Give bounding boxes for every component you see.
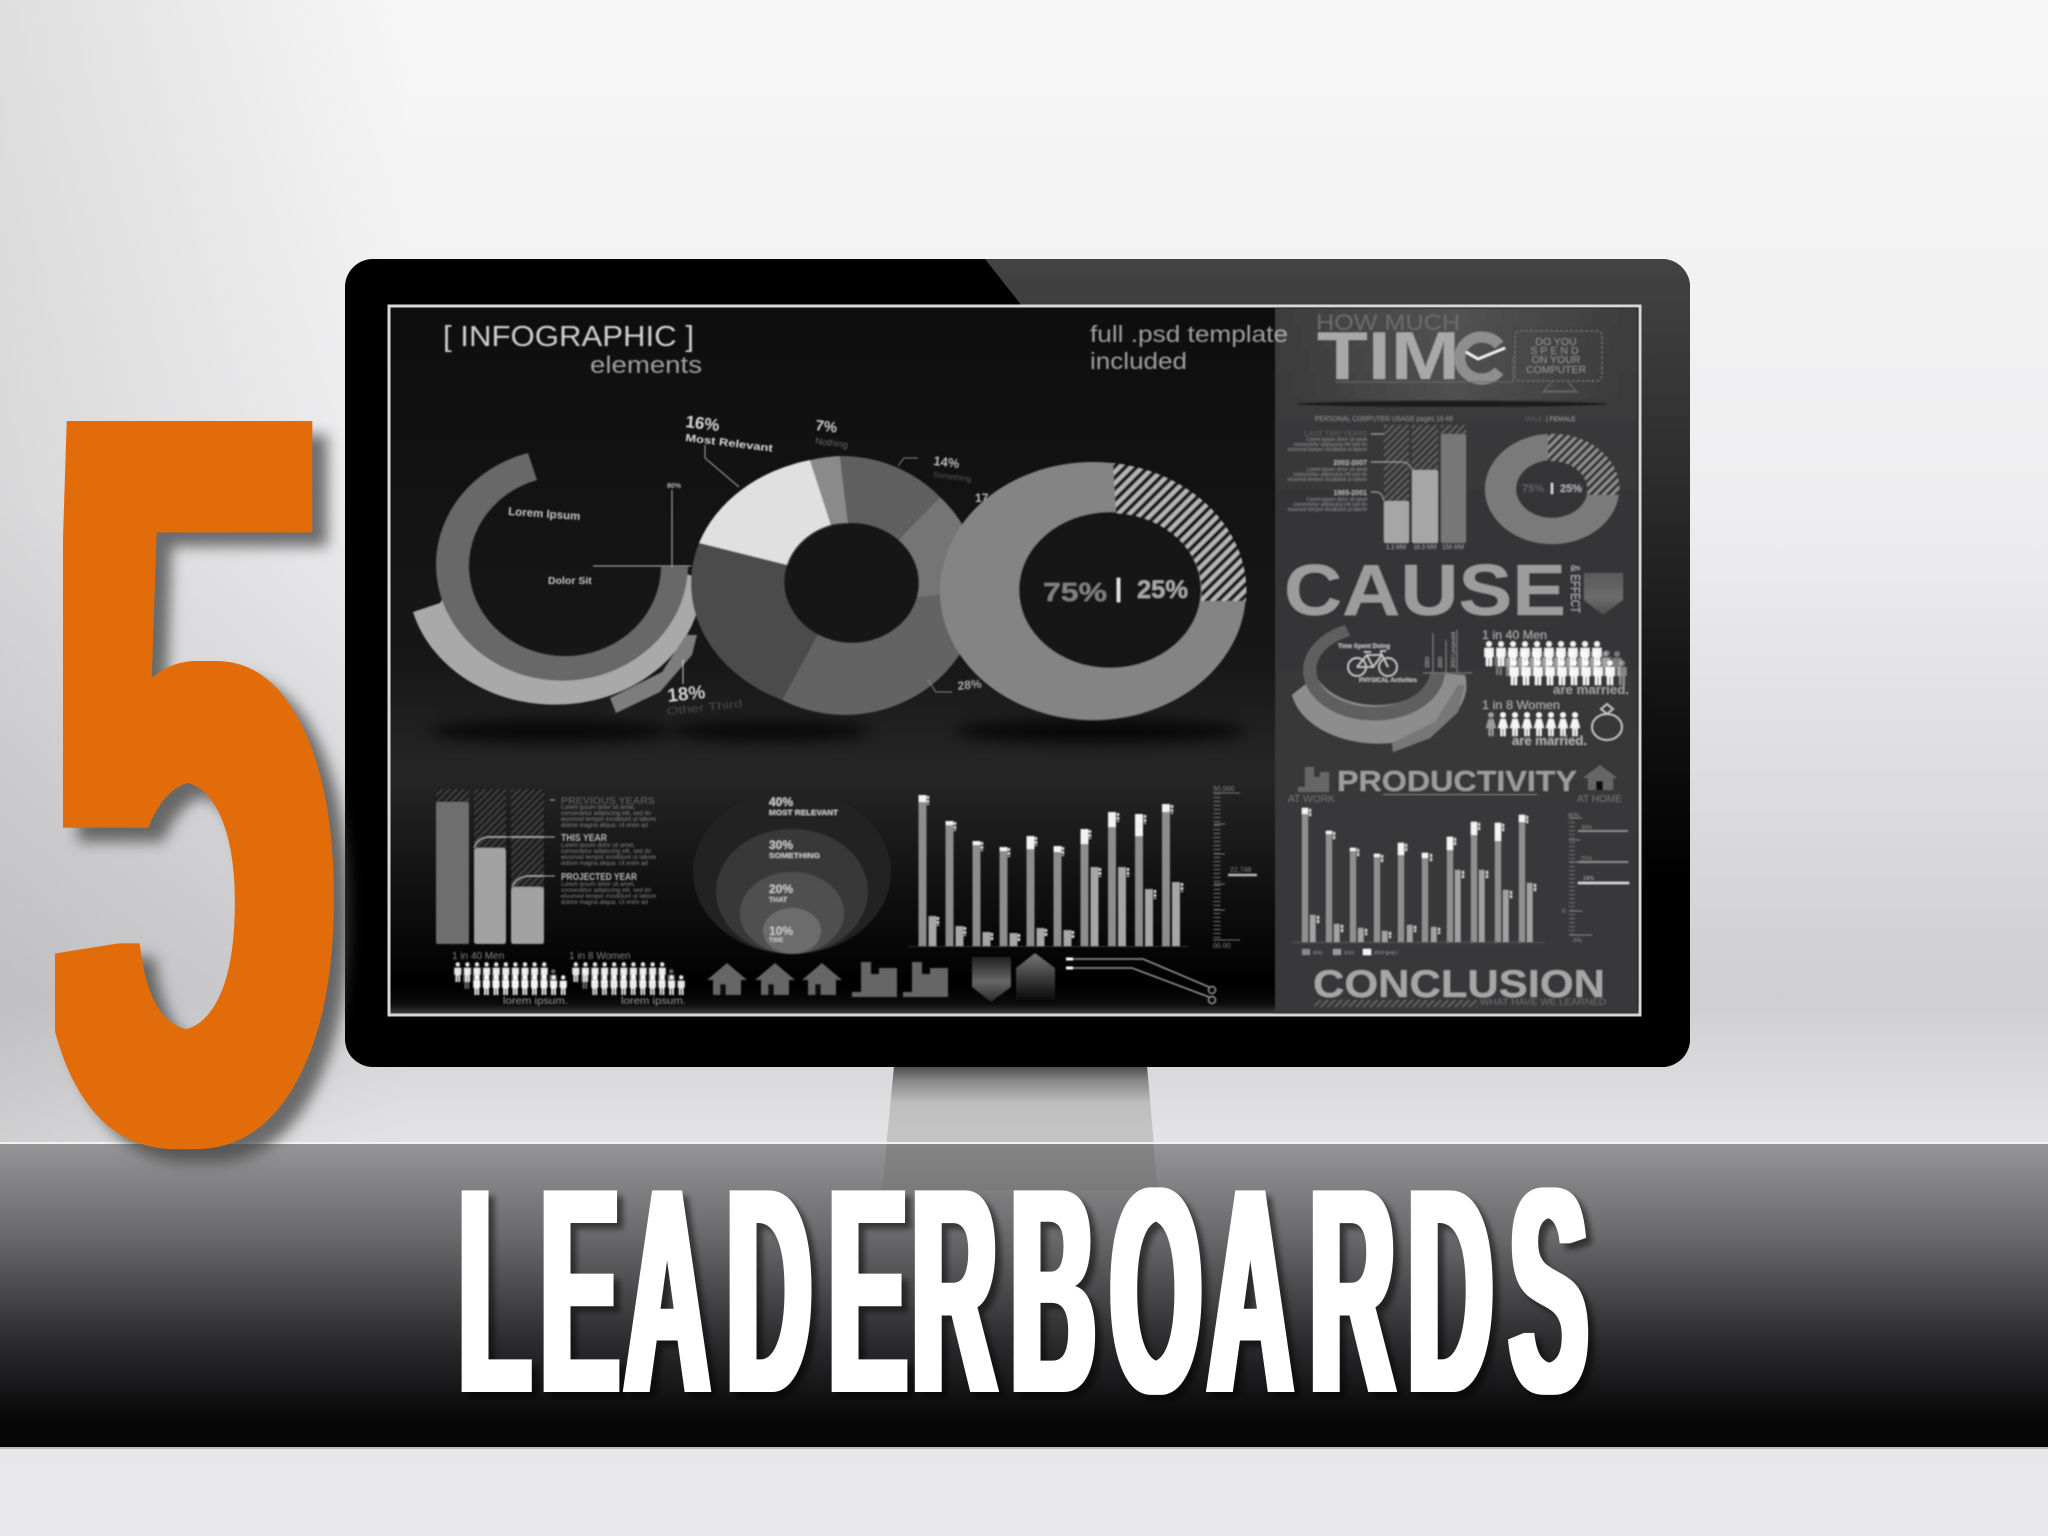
heading: infographic elements: [ INFOGRAPHIC ] <box>443 321 694 353</box>
label: 14% something: 14% <box>933 453 961 471</box>
chart: vertical scale <box>1213 786 1257 950</box>
heading: productivity: AT WORK <box>1288 794 1335 805</box>
heading: how much time: HOW MUCH <box>1316 310 1460 335</box>
usage period text: 2002-2007 <box>1334 460 1367 467</box>
chart: productivity bars <box>1292 808 1545 955</box>
icon: house <box>1583 765 1617 790</box>
chart: nested ovals <box>693 790 891 954</box>
chart heading: computer usage: PERSONAL COMPUTER USAGE pages 16-68 <box>1315 416 1453 423</box>
note: template included: full .psd template <box>1090 321 1288 347</box>
bar captions: 156 MM <box>1442 545 1464 551</box>
bar captions: 1.1 MM <box>1386 545 1406 551</box>
pictogram: 1 in 40 men are married: 1 in 40 Men <box>1482 628 1547 642</box>
bezel glare <box>985 259 1690 1067</box>
activity axis: 2000 <box>1438 657 1444 668</box>
bar legend text: consectetur adipiscing elit, sed do <box>561 811 652 817</box>
label: 16% most relevant: Most Relevant <box>685 432 774 455</box>
chart heading: computer usage: | FEMALE <box>1546 416 1576 423</box>
monitor stand <box>882 1066 1158 1190</box>
heading: conclusion: CONCLUSION <box>1313 963 1605 1006</box>
chart heading: computer usage: MALE <box>1525 416 1543 423</box>
bar legend text: eiusmod tempor incididunt ut labore <box>561 894 657 900</box>
heading: how much time: TIM <box>1317 318 1460 394</box>
label: 16% most relevant <box>685 412 774 455</box>
oval labels: MOST RELEVANT <box>769 810 839 817</box>
bar captions <box>1386 545 1464 551</box>
label: 14% something <box>898 453 972 484</box>
activity labels: PHYSICAL Activities <box>1359 678 1418 684</box>
chart: vertical scale: 50,000 <box>1213 786 1235 793</box>
bar legend text: eiusmod tempor incididunt ut labore <box>561 817 657 823</box>
chart legend <box>1302 949 1398 955</box>
chart: paired bar chart <box>908 795 1189 946</box>
chart: central segmented pie <box>666 412 989 718</box>
bottom title band <box>0 1142 2048 1449</box>
bar legend text: consectetur adipiscing elit, sed do <box>561 888 652 894</box>
activity labels <box>1338 644 1418 684</box>
heading: conclusion: WHAT HAVE WE LEARNED <box>1480 997 1607 1007</box>
icons: buildings <box>852 962 948 997</box>
usage period text <box>1288 431 1368 513</box>
activity axis: 1960 <box>1425 657 1431 668</box>
heading: productivity: PRODUCTIVITY <box>1337 766 1577 798</box>
icon: bicycle <box>1348 651 1397 676</box>
icon: clock <box>1460 337 1505 379</box>
small donut value <box>1522 483 1582 495</box>
bar legend text: eiusmod tempor incididunt ut labore <box>561 855 657 861</box>
pictogram: 1 in 40 men are married <box>1482 628 1629 697</box>
icon: down pentagon <box>972 957 1011 1002</box>
heading: cause and effect: & EFFECT <box>1568 565 1583 613</box>
donut value: 75% <box>1043 577 1107 607</box>
oval labels: 20% <box>769 882 793 896</box>
usage period text: eiusmod tempor incididunt ut labore <box>1288 507 1367 513</box>
chart: percent scale: 21% <box>1581 856 1592 862</box>
icon: building <box>1298 767 1329 792</box>
usage period text: consectetur adipiscing elit sed do <box>1293 502 1367 508</box>
bar legend text: Lorem ipsum dolor sit amet, <box>561 882 635 888</box>
white bar caps <box>918 795 1170 852</box>
note: template included <box>1090 321 1288 374</box>
label: small percents: 80% <box>667 483 682 490</box>
callout: do you spend on your computer: COMPUTER <box>1526 364 1586 376</box>
screen frame <box>389 306 1640 1015</box>
pictogram: 1 in 8 women are married: 1 in 8 Women <box>1482 698 1560 712</box>
heading: how much time <box>1316 310 1505 394</box>
usage period text: Lorem ipsum dolor sit amet <box>1307 497 1368 503</box>
label: 16% most relevant: 16% <box>685 412 721 435</box>
chart legend: 2012 <box>1344 950 1355 955</box>
icons: houses <box>707 963 842 995</box>
chart: vertical scale: 22,748 <box>1230 867 1252 874</box>
callout: do you spend on your computer <box>1335 331 1602 392</box>
label: 7% nothing: 7% <box>815 417 838 437</box>
monitor bezel <box>345 259 1690 1067</box>
oval labels: TIME <box>769 938 783 944</box>
pictogram: 1 in 8 women: lorem ipsum. <box>621 995 686 1007</box>
oval labels: THAT <box>769 897 788 904</box>
activity axis: 2010 | projected <box>1451 632 1457 668</box>
label: dolor sit: Dolor Sit <box>548 575 592 587</box>
leader line <box>705 445 739 487</box>
bar legend text: dolore magna aliqua. Ut enim ad <box>561 823 648 829</box>
bar legend text: PROJECTED YEAR <box>561 872 638 883</box>
floor shadows <box>430 719 1245 743</box>
chart: activity arcs <box>1292 625 1472 752</box>
chart legend: 2013 (proj.) <box>1374 950 1398 955</box>
heading: infographic elements <box>443 321 702 379</box>
usage period text: eiusmod tempor incididunt ut labore <box>1288 447 1367 453</box>
chart: percent scale <box>1562 813 1629 944</box>
usage period text: eiusmod tempor incididunt ut labore <box>1288 477 1367 483</box>
usage period text: Lorem ipsum dolor sit amet <box>1307 437 1368 443</box>
bar legend text <box>561 796 657 906</box>
pictogram: 1 in 40 men <box>452 951 568 1007</box>
label: 28%: 28% <box>957 677 983 693</box>
pictogram: 1 in 8 women are married <box>1482 698 1622 748</box>
chart heading: computer usage <box>1315 416 1576 423</box>
donut value: 25% <box>1137 576 1188 604</box>
chart: three year bars <box>436 789 657 944</box>
chart: 75/25 donut <box>940 462 1246 720</box>
label: 18% other third <box>666 660 743 718</box>
bar legend text: dolore magna aliqua. Ut enim ad <box>561 861 648 867</box>
short bars <box>928 867 1180 946</box>
bar legend text: consectetur adipiscing elit, sed do <box>561 849 652 855</box>
oval labels: SOMETHING <box>769 853 821 860</box>
chart: left concentric arcs <box>413 453 702 713</box>
usage period text: LAST TWO YEARS <box>1305 431 1367 438</box>
chart: vertical scale: 00.00 <box>1213 943 1231 950</box>
icon: up pentagon <box>1016 953 1055 1000</box>
usage period text: consectetur adipiscing elit sed do <box>1293 472 1367 478</box>
heading: infographic elements: elements <box>590 352 702 379</box>
oval labels: 10% <box>769 924 793 938</box>
label: lorem ipsum: Lorem Ipsum <box>508 506 581 523</box>
leader lines <box>593 490 691 567</box>
pictogram: 1 in 8 women: 1 in 8 Women <box>569 951 631 962</box>
label: 7% nothing: Nothing <box>815 436 848 451</box>
callout: do you spend on your computer: DO YOU <box>1535 336 1577 348</box>
bar legend text: dolore magna aliqua. Ut enim ad <box>561 900 648 906</box>
bar legend text: Lorem ipsum dolor sit amet, <box>561 843 635 849</box>
usage period text: consectetur adipiscing elit sed do <box>1293 442 1367 448</box>
small donut value: 75% <box>1522 483 1544 495</box>
white bar caps <box>1302 808 1525 858</box>
number 5: 5 <box>38 199 337 1356</box>
right panel background <box>1275 308 1638 1013</box>
callout: do you spend on your computer: ON YOUR <box>1532 354 1581 366</box>
usage period text: Lorem ipsum dolor sit amet <box>1307 467 1368 473</box>
pictogram: 1 in 40 men: 1 in 40 Men <box>452 951 504 962</box>
oval labels: 40% <box>769 795 793 809</box>
pictogram: 1 in 8 women <box>569 951 686 1007</box>
tall bars <box>1302 808 1525 942</box>
heading: productivity <box>1288 765 1622 805</box>
title: leaderboards: LEADERBOARDS <box>459 1128 1588 1455</box>
screen content <box>413 308 1638 1013</box>
icon: ring <box>1592 704 1622 740</box>
short bars <box>1310 870 1532 942</box>
bar legend text: THIS YEAR <box>561 833 608 844</box>
chart: percent scale: -6% <box>1572 938 1582 944</box>
oval labels: 30% <box>769 838 793 852</box>
pictogram: 1 in 40 men are married: are married. <box>1553 683 1629 697</box>
circuit lines <box>1066 959 1216 1004</box>
activity axis <box>1423 630 1472 673</box>
chart: computer usage bars <box>1288 425 1466 551</box>
bar legend text: Lorem ipsum dolor sit amet, <box>561 805 635 811</box>
activity labels: Time Spent Doing <box>1338 644 1390 650</box>
pictogram: 1 in 40 men: lorem ipsum. <box>503 995 568 1007</box>
chart: percent scale: 34% <box>1581 825 1592 831</box>
icon: down pentagon <box>1584 573 1623 615</box>
bar legend text: PREVIOUS YEARS <box>561 796 655 807</box>
donut value <box>1043 576 1188 607</box>
callout: do you spend on your computer: SPEND <box>1530 345 1582 357</box>
label: 7% nothing <box>815 417 848 451</box>
chart legend: 2011 <box>1313 950 1323 955</box>
monitor <box>345 259 1690 1067</box>
chart: percent scale: 40% <box>1568 813 1579 819</box>
chart: percent scale: 14% <box>1583 876 1594 882</box>
label: 17%: 17 <box>975 491 989 505</box>
usage period text: 1985-2001 <box>1334 490 1367 497</box>
label: 14% something: Something <box>933 470 972 484</box>
label: 18% other third: 18% <box>666 682 706 707</box>
tall bars <box>918 795 1170 946</box>
label: 18% other third: Other Third <box>666 698 743 718</box>
heading: productivity: AT HOME <box>1577 794 1622 805</box>
pictogram: 1 in 8 women are married: are married. <box>1512 734 1587 748</box>
note: template included: included <box>1090 348 1187 374</box>
heading: cause and effect: CAUSE <box>1284 551 1566 631</box>
bar captions: 16.3 MM <box>1413 545 1437 551</box>
label: 28% <box>928 677 983 693</box>
small donut value: 25% <box>1560 483 1582 495</box>
chart: percent scale: 0 <box>1562 909 1566 915</box>
oval labels <box>769 795 839 944</box>
chart: small donut <box>1485 434 1619 544</box>
